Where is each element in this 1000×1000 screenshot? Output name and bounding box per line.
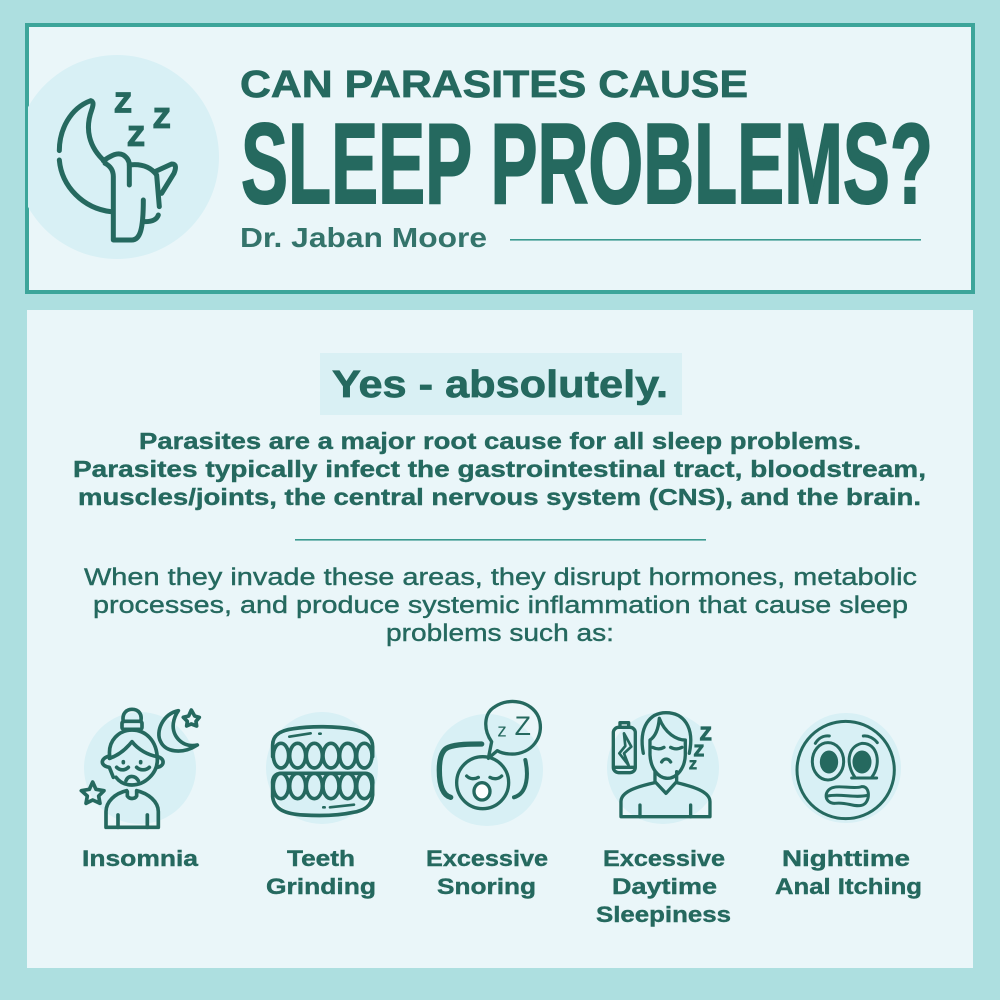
label: nighttime anal itching: Nighttime: [782, 846, 910, 871]
label: excessive daytime sleepiness: Excessive: [603, 846, 725, 871]
item: excessive snoring: [431, 701, 543, 826]
icon: sleeping moon and bat: Z: [128, 121, 144, 152]
text block: root cause: muscles/joints, the central nervous system (CNS), and the brain.: [78, 484, 921, 510]
label: teeth grinding: Grinding: [266, 874, 376, 899]
panel: header: [15, 25, 973, 292]
item: teeth grinding: [266, 712, 378, 824]
text block: invasion effects: problems such as:: [386, 620, 614, 647]
heading: can parasites cause: CAN PARASITES CAUSE: [240, 64, 748, 106]
text block: invasion effects: When they invade these areas, they disrupt hormones, metabolic: [84, 564, 917, 591]
callout: yes absolutely: Yes - absolutely.: [332, 364, 668, 406]
label: teeth grinding: Teeth: [287, 846, 355, 871]
label: teeth grinding: [266, 846, 376, 899]
label: excessive daytime sleepiness: Sleepiness: [596, 902, 731, 927]
item: insomnia: [81, 709, 199, 827]
label: excessive daytime sleepiness: Daytime: [612, 874, 717, 899]
label: excessive snoring: Snoring: [437, 874, 536, 899]
label: nighttime anal itching: Anal Itching: [775, 874, 922, 899]
label: excessive daytime sleepiness: [596, 846, 731, 927]
author: Dr. Jaban Moore: [240, 222, 487, 253]
text block: root cause: Parasites are a major root cause for all sleep problems.: [139, 428, 861, 454]
icon: sleeping moon and bat: Z: [153, 103, 170, 134]
label: excessive snoring: Excessive: [426, 846, 548, 871]
item: excessive daytime sleepiness: [607, 712, 719, 824]
callout: yes absolutely: [320, 353, 682, 415]
label: excessive snoring: [426, 846, 548, 899]
text block: invasion effects: [84, 564, 917, 647]
item: excessive daytime sleepiness: Z: [689, 758, 697, 772]
text block: invasion effects: processes, and produce systemic inflammation that cause sleep: [93, 592, 908, 619]
icon: sleeping moon and bat: [15, 55, 219, 259]
item: nighttime anal itching: [791, 713, 901, 823]
panel: body: [27, 310, 973, 968]
item: excessive snoring: z: [497, 720, 507, 741]
text block: root cause: [73, 428, 926, 510]
label: nighttime anal itching: [775, 846, 922, 899]
label: insomnia: Insomnia: [82, 846, 199, 871]
text block: root cause: Parasites typically infect the gastrointestinal tract, bloodstream,: [73, 456, 926, 482]
icon: sleeping moon and bat: Z: [115, 87, 131, 118]
item: excessive daytime sleepiness: Z: [700, 723, 711, 744]
item: excessive daytime sleepiness: Z: [694, 743, 704, 760]
item: excessive snoring: Z: [515, 711, 531, 741]
